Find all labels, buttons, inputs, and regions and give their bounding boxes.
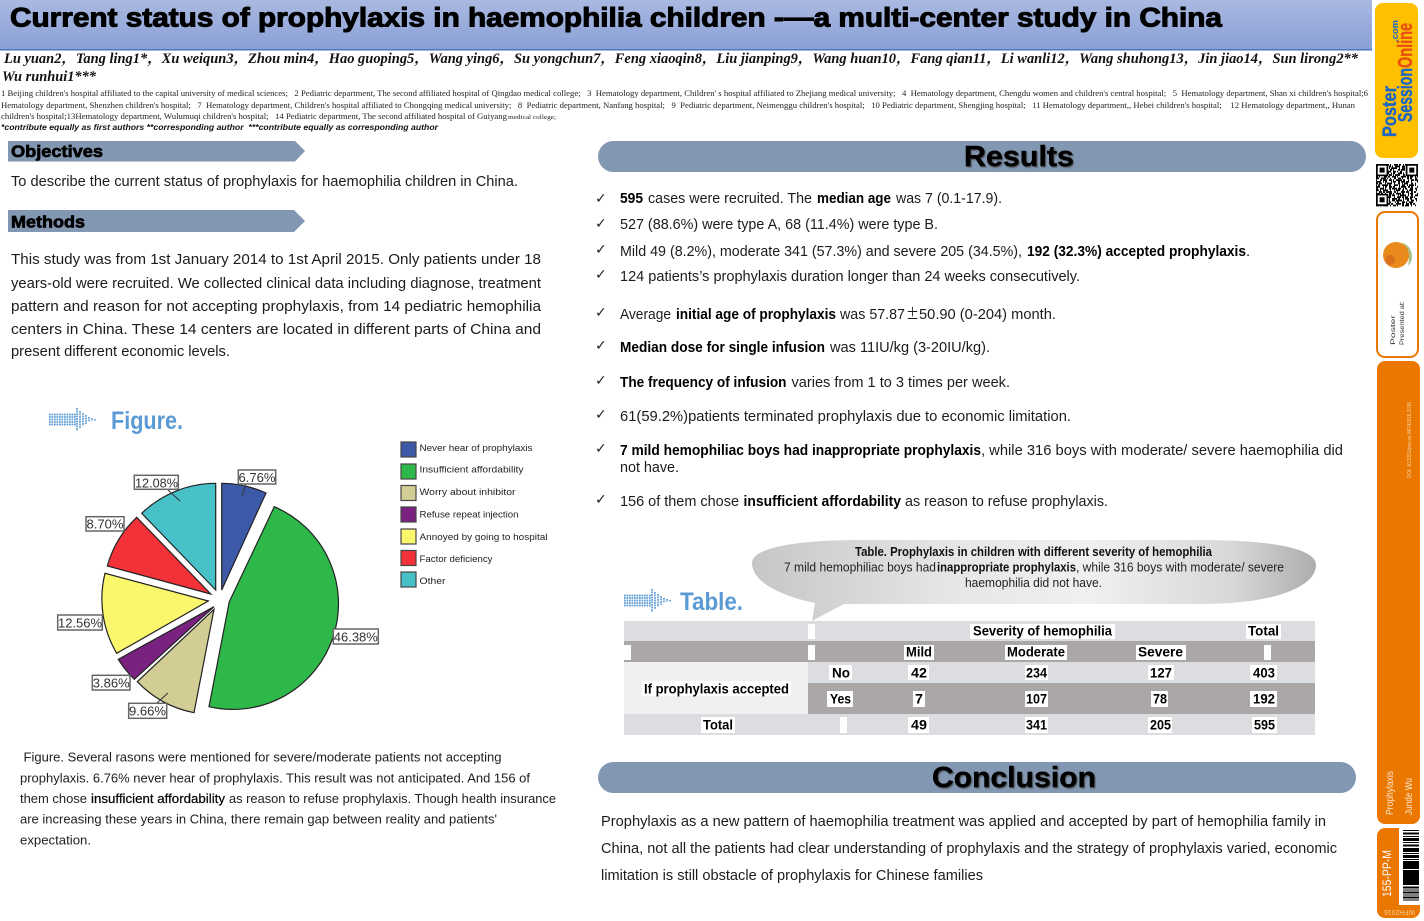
data labels: 6.76% (238, 470, 276, 485)
panel: conclusion (598, 762, 1356, 884)
bullet: frequency: The frequency of infusion (620, 374, 786, 391)
sidebar: presented at panel: Presented at: (1399, 301, 1406, 345)
data table: 341 (1026, 718, 1047, 732)
callout: table caption: inappropriate prophylaxis (937, 560, 1076, 574)
sidebar: PosterSessionOnline logo: Poster (1380, 85, 1401, 137)
sidebar: presented at panel: Poster (1390, 314, 1397, 345)
bullet: severity: . (1246, 243, 1250, 260)
sidebar: orange info panel: Prophylaxis (1385, 771, 1396, 815)
sidebar: PosterSessionOnline logo: Online (1395, 23, 1417, 68)
figure caption: prophylaxis. 6.76% never hear of prophylaxis. This result was not anticipated. And 156 of (20, 770, 530, 786)
bullet: affordability: 156 of them chose (620, 493, 739, 510)
bullet: initial age: ✓ (595, 305, 607, 321)
heading: conclusion (598, 762, 1356, 794)
icon: dotted arrow (table) (624, 589, 670, 612)
sidebar: orange info panel: DOI: 10.3252/pso.eu.WFH2016.2016 (1407, 402, 1413, 478)
bullet: frequency (595, 373, 1010, 391)
callout: table caption: , while 316 boys with moderate/ severe (1076, 560, 1284, 574)
data table: 234 (1026, 666, 1047, 680)
bullet: duration: ✓ (595, 267, 607, 283)
poster id: 155-PP-M (1380, 850, 1394, 897)
conclusion text: limitation is still obstacle of prophylaxis for Chinese families (601, 867, 983, 884)
conclusion text: Prophylaxis as a new pattern of haemophilia treatment was applied and accepted by part of hemophilia family in (601, 813, 1326, 830)
heading: figure: Figure. (111, 407, 183, 435)
sidebar: orange info panel: Junde Wu (1404, 778, 1415, 815)
legend (401, 442, 548, 587)
affiliations: children's hospital;13Hematology department, Wulumuqi children's hospital; 14 Pediatric department, The second affiliated hospital of Guiyang (1, 111, 508, 121)
data table: Mild (906, 644, 932, 660)
bullet: cases and age: median age (817, 190, 891, 207)
bullet: duration: 124 patients’s prophylaxis duration longer than 24 weeks consecutively. (620, 268, 1080, 285)
bullet: inappropriate prophylaxis: , while 316 boys with moderate/ severe haemophilia did (981, 442, 1343, 459)
data table: Total (703, 718, 733, 732)
bullet: inappropriate prophylaxis: 7 mild hemophiliac boys had inappropriate prophylaxis (620, 442, 981, 459)
sidebar: orange info panel (1377, 361, 1420, 824)
data labels: 12.08% (135, 475, 178, 490)
bullet: initial age: was 57.87 (839, 306, 905, 323)
bullet: inappropriate prophylaxis: not have. (620, 459, 679, 476)
bullet: cases and age: 595 (620, 190, 643, 207)
methods text (11, 251, 542, 360)
conclusion text (601, 813, 1337, 884)
heading: results: Results (964, 141, 1074, 173)
conclusion text: China, not all the patients had clear understanding of prophylaxis and the strategy of prophylaxis varied, economic (601, 840, 1337, 857)
bullet: dose: Median dose for single infusion (620, 339, 825, 356)
bullet: severity: 192 (32.3%) accepted prophylaxis (1027, 243, 1246, 260)
slice: never hear 6.76% (222, 483, 266, 590)
heading: objectives (8, 141, 305, 162)
heading: results (598, 141, 1366, 173)
data table: 403 (1253, 666, 1275, 680)
legend: Annoyed by going to hospital (420, 532, 548, 543)
bullet: cases and age: was 7 (0.1-17.9). (895, 190, 1002, 207)
bullet: initial age (595, 303, 1056, 324)
bullet: initial age: 50.90 (0-204) month. (919, 306, 1056, 323)
affiliations (1, 88, 1369, 132)
bullet: types: 527 (88.6%) were type A, 68 (11.4%) were type B. (620, 216, 938, 233)
data table: 49 (911, 718, 927, 732)
bullet: dose (595, 338, 990, 356)
data table: 205 (1150, 718, 1171, 732)
bullet: inappropriate prophylaxis (595, 441, 1343, 476)
figure caption: Figure. Several rasons were mentioned for severe/moderate patients not accepting (24, 750, 502, 764)
bullet: termination: ✓ (595, 407, 607, 423)
sidebar: QR code (1376, 164, 1418, 206)
legend: Factor deficiency (420, 554, 493, 565)
data labels: 46.38% (334, 629, 378, 644)
data table: 595 (1254, 718, 1275, 732)
conference tag: WFH2016 (1384, 908, 1415, 915)
pie chart (58, 470, 378, 718)
slice: refuse repeat injection 3.86% (118, 607, 214, 679)
data table: No (832, 666, 850, 680)
callout: table caption: haemophilia did not have. (965, 576, 1102, 590)
data labels: 12.56% (58, 615, 102, 630)
affiliations: Hematology department, Shenzhen children's hospital; 7 Hematology department, Children's hospital affiliated to Chongqing medical university; 8 Pediatric department, Nanfang hospital; 9 Pediatric department, Neimenggu children's hospital; 10 Pediatric department, Shengjing hospital; 11 Hematology department,, Hebei children's hospital; 12 Hematology department,, Hunan (1, 100, 1356, 110)
heading: conclusion: Conclusion (932, 762, 1096, 794)
icon: WFH congress logo (1383, 242, 1412, 268)
bullet: affordability: insufficient affordability (744, 493, 902, 510)
data table: Severity of hemophilia (973, 624, 1112, 638)
slice: factor deficiency 8.70% (107, 517, 211, 594)
sidebar: PosterSessionOnline logo: .com (1390, 20, 1400, 42)
bullet: initial age: Average (620, 306, 671, 323)
slice: annoyed by going to hospital 12.56% (102, 573, 208, 653)
figure caption: them chose (20, 791, 87, 806)
sidebar: PosterSessionOnline logo (1375, 3, 1418, 158)
figure caption: are increasing these years in China, there remain gap between reality and patients' (20, 812, 497, 826)
bullet: severity (595, 242, 1250, 260)
data labels (58, 470, 378, 718)
data table: Moderate (1007, 644, 1065, 660)
sidebar: presented at panel (1377, 212, 1418, 357)
legend: Refuse repeat injection (420, 510, 518, 520)
data table: 78 (1153, 692, 1167, 706)
bullet: dose: was 11IU/kg (3-20IU/kg). (829, 339, 990, 356)
legend: Insufficient affordability (420, 464, 524, 476)
panel: results (595, 141, 1366, 510)
bullet: severity: Mild 49 (8.2%), moderate 341 (57.3%) and severe 205 (34.5%), (620, 243, 1022, 260)
bullet: inappropriate prophylaxis: ✓ (595, 441, 607, 457)
figure caption (20, 750, 556, 848)
sidebar: PosterSessionOnline logo: Session (1395, 68, 1417, 122)
objectives text: To describe the current status of prophylaxis for haemophilia children in China. (11, 173, 518, 190)
bullet: affordability: as reason to refuse prophylaxis. (905, 493, 1108, 510)
slice: other 12.08% (142, 483, 216, 590)
methods text: years-old were recruited. We collected clinical data including diagnose, treatment (11, 275, 542, 292)
data labels: 8.70% (86, 517, 124, 532)
data table: 107 (1026, 692, 1047, 706)
methods text: This study was from 1st January 2014 to 1st April 2015. Only patients under 18 (11, 251, 541, 268)
data table: Yes (830, 692, 851, 706)
bullet: types: ✓ (595, 216, 607, 232)
title: Current status of prophylaxis in haemophilia children -—a multi-center study in China (10, 2, 1223, 32)
methods text: pattern and reason for not accepting prophylaxis, from 14 pediatric hemophilia (11, 298, 542, 315)
data table: 127 (1150, 666, 1172, 680)
icon: dotted arrow (figure) (49, 408, 95, 431)
title banner (0, 0, 1372, 50)
affiliations: 1 Beijing children's hospital affiliated to the capital university of medical sciences; 2 Pediatric department, The second affiliated hospital of Qingdao medical college; 3 Hematology department, Children' s hospital affiliated to Zhejiang medical university; 4 Hematology department, Chengdu women and children's central hospital; 5 Hematology department, Shan xi children's hospital;6 (1, 88, 1369, 98)
callout: table caption (752, 540, 1316, 621)
bullet: severity: ✓ (595, 242, 607, 258)
data table (624, 621, 1315, 735)
bullet: affordability (595, 492, 1108, 510)
heading: table: Table. (680, 588, 743, 616)
data table: Total (1248, 624, 1279, 638)
authors: Wu runhui1*** (2, 69, 97, 85)
bullet: frequency: ✓ (595, 373, 607, 389)
data labels: 3.86% (93, 676, 130, 690)
methods text: centers in China. These 14 centers are located in different parts of China and (11, 321, 541, 338)
callout: table caption: 7 mild hemophiliac boys had (784, 560, 936, 574)
bullet: dose: ✓ (595, 338, 607, 354)
bullet: affordability: ✓ (595, 492, 607, 508)
barcode (1403, 830, 1419, 900)
sidebar: poster id and barcode (1377, 828, 1420, 918)
bullet: initial age: initial age of prophylaxis (676, 306, 836, 323)
figure caption: insufficient affordability (91, 791, 226, 806)
figure caption: expectation. (20, 832, 91, 848)
bullet: cases and age (595, 190, 1002, 207)
heading: objectives: Objectives (11, 142, 103, 161)
methods text: present different economic levels. (11, 343, 230, 360)
data table: 7 (915, 692, 923, 706)
bullet: frequency: varies from 1 to 3 times per week. (792, 374, 1010, 391)
bullet: cases and age: ✓ (595, 191, 607, 207)
authors: Lu yuan2，Tang ling1*，Xu weiqun3，Zhou min4，Hao guoping5，Wang ying6，Su yongchun7，Feng xiaoqin8，Liu jianping9，Wang huan10，Fang qian11，Li wanli12，Wang shuhong13，Jin jiao14，Sun lirong2** (3, 51, 1359, 67)
heading: methods (8, 210, 305, 232)
data table: Severe (1138, 644, 1183, 660)
data table: 42 (911, 666, 927, 680)
bullet: cases and age: cases were recruited. The (648, 190, 812, 207)
slice: insufficient affordability 46.38% (209, 507, 338, 709)
bullet: termination: 61(59.2%)patients terminated prophylaxis due to economic limitation. (620, 408, 1071, 425)
affiliations: *contribute equally as first authors **corresponding author ***contribute equally as corresponding author (1, 122, 439, 132)
slice: worry about inhibitor 9.66% (137, 609, 214, 713)
data table: If prophylaxis accepted (644, 682, 789, 696)
legend: Worry about inhibitor (420, 487, 516, 498)
legend: Other (420, 576, 446, 587)
panel: methods (8, 210, 542, 360)
affiliations: medical college; (508, 114, 556, 121)
authors (2, 51, 1359, 85)
callout: table caption: Table. Prophylaxis in children with different severity of hemophilia (855, 545, 1213, 559)
legend: Never hear of prophylaxis (420, 443, 533, 454)
panel: objectives (8, 141, 518, 190)
figure caption: as reason to refuse prophylaxis. Though health insurance (229, 791, 556, 806)
data table: 192 (1253, 692, 1275, 706)
heading: methods: Methods (11, 212, 85, 232)
bullet: initial age: ± (906, 303, 919, 324)
data labels: 9.66% (129, 704, 166, 718)
